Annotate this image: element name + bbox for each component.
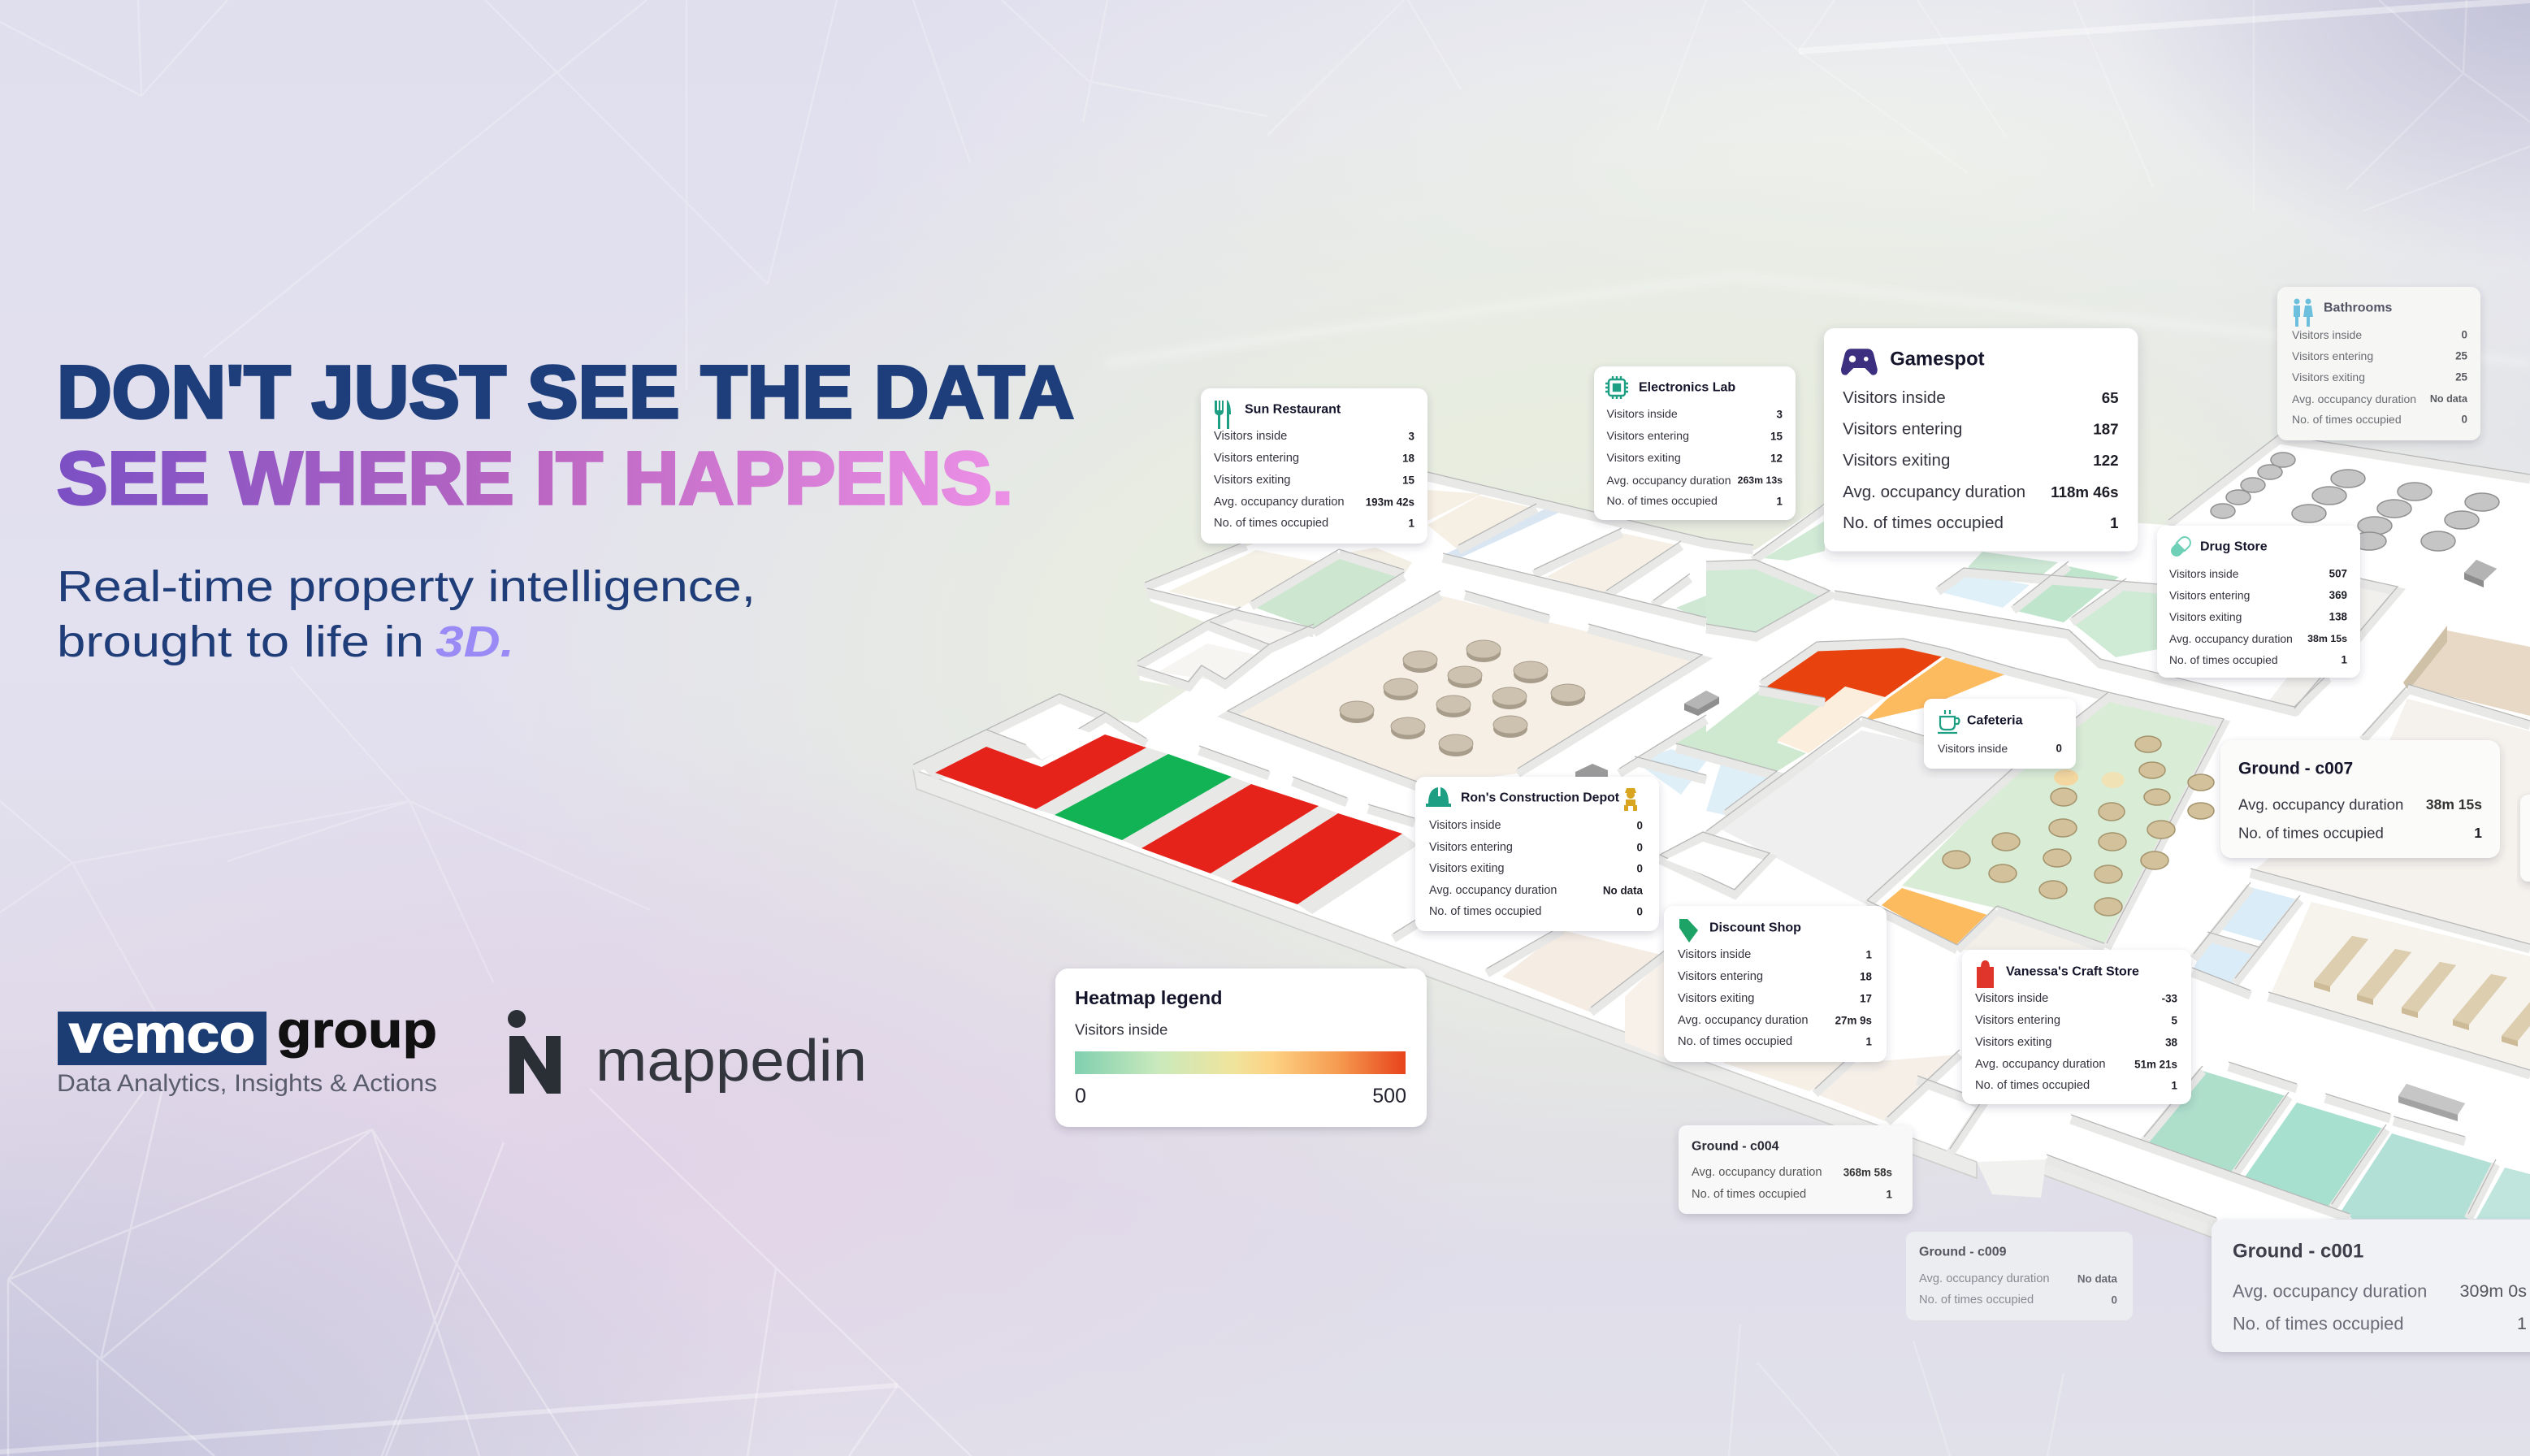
card: Discount Shop: 1 <box>1866 1035 1873 1048</box>
icon: game controller <box>1841 349 1878 375</box>
faded text rows: Bathrooms <box>2324 301 2393 315</box>
card: Cafeteria <box>1924 699 2076 769</box>
card: Drug Store: Visitors inside <box>2169 567 2239 580</box>
subheading: brought to life in <box>57 618 424 666</box>
card: Sun Restaurant: Visitors entering <box>1214 452 1299 465</box>
faded text rows: Visitors exiting <box>2292 370 2365 384</box>
card: Gamespot: Gamespot <box>1890 348 1985 370</box>
floor slab <box>913 440 2530 1223</box>
subheading: 3D. <box>435 618 514 666</box>
card: Ground - c004: No. of times occupied <box>1692 1188 1806 1201</box>
logo: mappedin <box>508 1010 867 1094</box>
card: Drug Store: 369 <box>2329 589 2347 601</box>
heading: don't just see the data: DON'T JUST SEE THE DATA <box>57 351 1074 434</box>
card: Electronics Lab <box>1594 366 1796 520</box>
heatmap rooms: teal row <box>2144 1071 2530 1219</box>
legend scale values: 500 <box>1372 1085 1406 1107</box>
logo: vemco group: group <box>277 1003 437 1059</box>
card: Vanessa's Craft Store: 5 <box>2172 1014 2178 1027</box>
icon: people <box>2294 299 2313 327</box>
card: Ron's Construction Depot: Ron's Construction Depot <box>1461 791 1620 804</box>
card: Vanessa's Craft Store: 1 <box>2172 1079 2178 1092</box>
card: Ground - c004: 368m 58s <box>1843 1167 1892 1178</box>
tables in central room <box>1340 640 1585 756</box>
heatmap rooms: hot and warm centre <box>1761 644 2011 948</box>
card: Vanessa's Craft Store: -33 <box>2162 993 2177 1004</box>
card: Sun Restaurant <box>1201 388 1427 544</box>
icon: shopping bag <box>1978 961 1993 987</box>
card: Sun Restaurant: Visitors exiting <box>1214 474 1290 487</box>
panel: heatmap legend <box>1055 968 1427 1127</box>
card: Ground - c001: 309m 0s <box>2460 1281 2527 1301</box>
card: Ground - c009 (faded) <box>1906 1232 2133 1320</box>
card: Discount Shop: Avg. occupancy duration <box>1678 1014 1809 1027</box>
card: Ground - c009 (faded): Ground - c009 <box>1919 1245 2007 1259</box>
card: Cafeteria: Visitors inside <box>1938 742 2008 755</box>
card: Sun Restaurant: Avg. occupancy duration <box>1214 496 1345 509</box>
card: Vanessa's Craft Store: Avg. occupancy duration <box>1975 1058 2106 1071</box>
heading: see where it happens: SEE WHERE IT HAPPENS. <box>57 437 1013 520</box>
card: Ground - c007: Avg. occupancy duration <box>2238 796 2403 812</box>
card: Electronics Lab: Visitors inside <box>1607 408 1678 421</box>
card: Vanessa's Craft Store: Vanessa's Craft Store <box>2006 965 2139 978</box>
white box inner rooms <box>1025 723 1093 760</box>
card: Vanessa's Craft Store: Visitors entering <box>1975 1014 2060 1027</box>
3D floor plan map <box>913 435 2530 1238</box>
room base strip under the red rooms <box>1036 748 1168 815</box>
card: Ron's Construction Depot: Avg. occupancy duration <box>1429 884 1557 897</box>
card: Gamespot: Avg. occupancy duration <box>1843 483 2025 501</box>
card: Sun Restaurant: 15 <box>1402 474 1415 486</box>
card: Electronics Lab: Avg. occupancy duration <box>1607 474 1731 487</box>
card: Vanessa's Craft Store: Visitors exiting <box>1975 1036 2051 1049</box>
card: Electronics Lab: 3 <box>1777 408 1783 421</box>
card: Gamespot <box>1824 328 2138 551</box>
card: Gamespot: Visitors exiting <box>1843 451 1950 470</box>
icon: fork and knife <box>1215 400 1231 429</box>
logo: vemco group <box>57 1003 437 1097</box>
card: Discount Shop: Visitors entering <box>1678 970 1763 983</box>
card: Drug Store: 507 <box>2329 567 2347 580</box>
card: Discount Shop: 1 <box>1866 949 1873 960</box>
card: Ground - c009 (faded): 0 <box>2112 1294 2117 1306</box>
card: Vanessa's Craft Store: Visitors inside <box>1975 992 2048 1005</box>
icon: chip <box>1605 376 1628 399</box>
faded text rows <box>2292 301 2468 426</box>
icon: coffee cup <box>1938 710 1960 733</box>
card: Discount Shop: Visitors inside <box>1678 948 1751 961</box>
card: Vanessa's Craft Store: 38 <box>2165 1037 2178 1048</box>
faded text rows: 25 <box>2455 349 2468 362</box>
faded text rows: 0 <box>2462 328 2467 341</box>
card: Discount Shop: 17 <box>1860 993 1872 1004</box>
card: Sun Restaurant: 193m 42s <box>1366 496 1414 509</box>
card: cut-off card at right edge <box>2520 795 2530 882</box>
card: Ground - c001: Ground - c001 <box>2233 1240 2363 1263</box>
card: Ground - c007: 38m 15s <box>2426 796 2482 812</box>
card: Ron's Construction Depot: Visitors exiting <box>1429 862 1505 875</box>
logo: mappedin: mappedin <box>596 1029 867 1094</box>
card: Ron's Construction Depot: 0 <box>1637 819 1643 832</box>
card: Drug Store: Visitors entering <box>2169 588 2250 601</box>
card: Discount Shop: 27m 9s <box>1835 1014 1872 1027</box>
card: Ron's Construction Depot: 0 <box>1637 905 1643 918</box>
card: Ron's Construction Depot: 0 <box>1637 842 1643 853</box>
walls <box>913 440 2530 1223</box>
card: Ground - c004: 1 <box>1887 1188 1893 1201</box>
card: Ground - c009 (faded): Avg. occupancy duration <box>1919 1272 2050 1285</box>
panel: heatmap legend: Visitors inside <box>1075 1020 1168 1038</box>
card: Ground - c001: Avg. occupancy duration <box>2233 1280 2427 1302</box>
card: Drug Store: 38m 15s <box>2307 633 2347 644</box>
icon: pill <box>2168 535 2193 559</box>
card: Gamespot: 122 <box>2093 452 2119 469</box>
card: Gamespot: 187 <box>2093 420 2119 437</box>
card: Sun Restaurant: No. of times occupied <box>1214 517 1328 530</box>
card: Cafeteria: 0 <box>2056 743 2062 754</box>
beige and pastel rooms <box>1158 490 2530 1122</box>
card: Ground - c004: Ground - c004 <box>1692 1139 1779 1154</box>
card: Ron's Construction Depot <box>1415 777 1659 931</box>
card: Bathrooms (faded) <box>2277 287 2480 440</box>
faded text rows: Visitors entering <box>2292 349 2373 362</box>
card: Electronics Lab: 1 <box>1777 496 1783 507</box>
faded text rows: No. of times occupied <box>2292 413 2402 426</box>
card: Drug Store <box>2157 526 2360 678</box>
card: Electronics Lab: 15 <box>1770 431 1783 442</box>
card: Ground - c007: No. of times occupied <box>2238 824 2384 842</box>
card: Drug Store: Drug Store <box>2200 540 2268 554</box>
card: Ron's Construction Depot: No. of times occupied <box>1429 905 1541 918</box>
subheading: Real-time property intelligence, <box>57 562 756 611</box>
faded text rows: 25 <box>2455 370 2468 384</box>
card: Ground - c001: No. of times occupied <box>2233 1313 2403 1334</box>
outer edge wall <box>913 769 1977 1178</box>
card: Ground - c004 <box>1679 1125 1913 1214</box>
card: Gamespot: 1 <box>2110 514 2119 531</box>
card: Sun Restaurant: 18 <box>1402 452 1415 465</box>
card: Drug Store: Visitors exiting <box>2169 610 2242 623</box>
card: Ground - c001: 1 <box>2517 1314 2527 1333</box>
card: Ground - c009 (faded): No. of times occupied <box>1919 1294 2034 1306</box>
card: Sun Restaurant: Visitors inside <box>1214 430 1287 443</box>
card: Drug Store: Avg. occupancy duration <box>2169 632 2293 645</box>
card: Drug Store: No. of times occupied <box>2169 653 2278 666</box>
card: Ground - c004: Avg. occupancy duration <box>1692 1166 1822 1179</box>
logo: vemco group: Data Analytics, Insights & Actions <box>57 1070 437 1097</box>
legend scale values: 0 <box>1075 1085 1086 1107</box>
faded text rows: 0 <box>2462 413 2467 426</box>
card: Drug Store: 1 <box>2342 653 2348 666</box>
subheading <box>57 562 756 666</box>
faded text rows: No data <box>2430 393 2468 405</box>
card: Drug Store: 138 <box>2329 611 2348 622</box>
card: Discount Shop: No. of times occupied <box>1678 1035 1792 1048</box>
card: Gamespot: 65 <box>2102 389 2119 406</box>
card: Electronics Lab: Visitors entering <box>1607 430 1689 443</box>
legend colour bar <box>1075 1051 1406 1074</box>
card: Ron's Construction Depot: Visitors inside <box>1429 819 1501 832</box>
card: Gamespot: No. of times occupied <box>1843 514 2004 532</box>
grey tables in upper right room <box>2211 453 2499 551</box>
card: Ground - c007 <box>2220 740 2500 858</box>
legend scale values <box>1075 1085 1406 1107</box>
icon: hard hat <box>1426 787 1451 807</box>
card: Discount Shop: 18 <box>1860 970 1873 983</box>
card: Ground - c001 <box>2212 1220 2530 1352</box>
card: Electronics Lab: 263m 13s <box>1738 474 1783 486</box>
faded text rows: Visitors inside <box>2292 328 2362 341</box>
card: Discount Shop: Discount Shop <box>1709 921 1801 934</box>
card: Ground - c007: Ground - c007 <box>2238 759 2353 778</box>
card: Gamespot: Visitors entering <box>1843 419 1962 438</box>
panel: heatmap legend: Heatmap legend <box>1075 987 1223 1008</box>
store benches <box>2314 936 2530 1046</box>
faded text rows: Avg. occupancy duration <box>2292 392 2416 405</box>
icon: gold worker <box>1624 788 1637 811</box>
card: Sun Restaurant: 3 <box>1409 431 1414 442</box>
card: Cafeteria: Cafeteria <box>1967 713 2023 728</box>
card: Discount Shop: Visitors exiting <box>1678 992 1754 1005</box>
card: Electronics Lab: Visitors exiting <box>1607 452 1681 465</box>
card: Sun Restaurant: Sun Restaurant <box>1245 403 1341 416</box>
card: Vanessa's Craft Store: No. of times occupied <box>1975 1079 2090 1092</box>
card: Vanessa's Craft Store: 51m 21s <box>2134 1058 2177 1071</box>
card: Ron's Construction Depot: No data <box>1603 884 1644 897</box>
icon: price tag <box>1679 919 1698 942</box>
card: Sun Restaurant: 1 <box>1409 517 1415 530</box>
card: Discount Shop <box>1664 906 1887 1062</box>
card: Vanessa's Craft Store <box>1962 950 2191 1104</box>
card: Ground - c009 (faded): No data <box>2077 1272 2118 1285</box>
grey kiosk boxes <box>1575 560 2497 1121</box>
card: Ron's Construction Depot: 0 <box>1637 863 1643 874</box>
logo: vemco group: vemco <box>69 1003 255 1064</box>
heatmap rooms: red and green wing <box>935 734 1402 904</box>
card: Ground - c007: 1 <box>2474 825 2482 841</box>
card: Ron's Construction Depot: Visitors entering <box>1429 841 1513 854</box>
card: Gamespot: Visitors inside <box>1843 388 1946 407</box>
tables in cafeteria <box>1943 736 2214 916</box>
card: Gamespot: 118m 46s <box>2051 483 2119 500</box>
card: Electronics Lab: No. of times occupied <box>1607 495 1718 508</box>
card: Electronics Lab: 12 <box>1770 452 1783 465</box>
card: Electronics Lab: Electronics Lab <box>1639 380 1735 395</box>
